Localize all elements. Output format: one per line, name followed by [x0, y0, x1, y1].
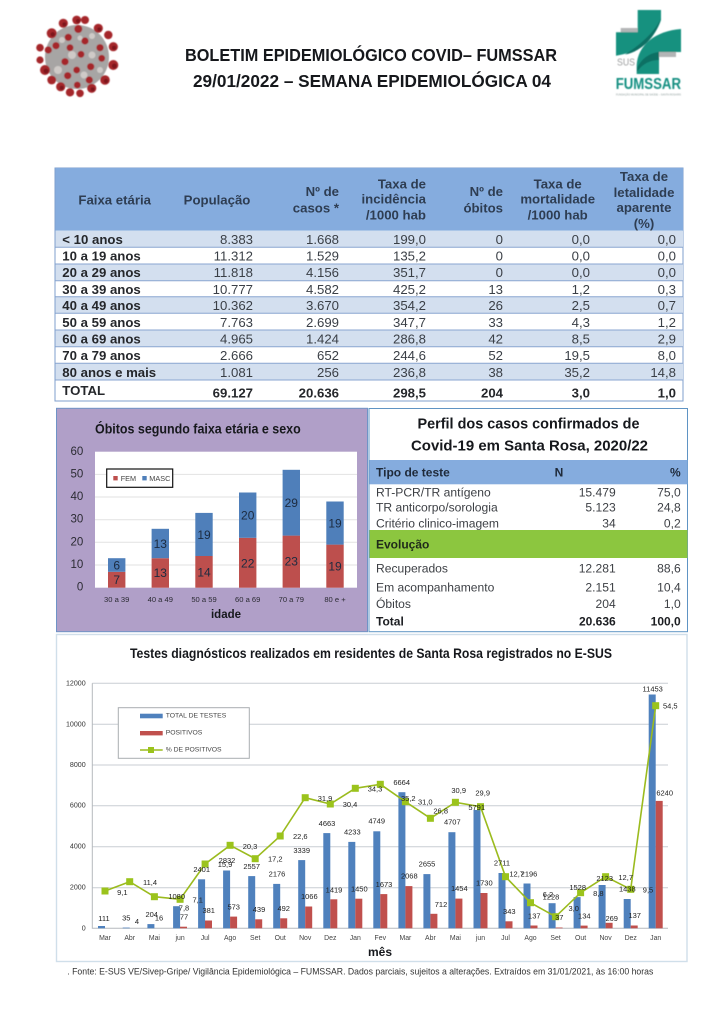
table rows: 1,2: [658, 315, 676, 330]
table rows: 10.777: [213, 282, 253, 297]
table rows: 8.383: [220, 232, 253, 247]
table rows: 11.312: [214, 248, 253, 264]
table rows: 347,7: [393, 315, 426, 330]
table total row: 1,0: [658, 386, 676, 400]
test type rows: 34: [602, 516, 616, 530]
bar values: 7: [113, 573, 120, 587]
table rows: 13: [488, 282, 503, 297]
table rows: 80 anos e mais: [62, 365, 156, 380]
table rows: 0,3: [658, 282, 676, 297]
grid and axis: 10000: [66, 720, 86, 728]
data labels: 573: [227, 902, 240, 912]
table rows: 0,7: [658, 298, 676, 313]
table rows: 10.362: [213, 298, 253, 313]
month labels: [99, 935, 661, 942]
test type rows: 24,8: [657, 500, 681, 514]
bar values: 14: [197, 565, 211, 579]
table header: incidência: [362, 192, 427, 206]
table rows: 38: [488, 365, 503, 380]
table header: Taxa de: [620, 169, 668, 184]
y axis labels: 0: [77, 582, 83, 594]
data labels: 439: [253, 905, 265, 914]
panel: age group table: [55, 168, 683, 401]
month labels: jun: [174, 935, 185, 942]
grid and axis: 4000: [70, 843, 86, 851]
data labels: 137: [628, 911, 641, 920]
month labels: Set: [550, 935, 561, 942]
month labels: Dez: [324, 935, 337, 942]
evolution rows: Recuperados: [376, 561, 448, 575]
month labels: Jul: [201, 935, 210, 942]
test type header: [370, 460, 688, 484]
evolution rows: 10,4: [657, 581, 681, 595]
evolution rows: 2.151: [585, 581, 616, 595]
data labels: 4: [135, 917, 139, 926]
evolution header: Evolução: [376, 538, 429, 552]
x axis labels: 50 a 59: [191, 595, 217, 604]
data labels: 34,3: [368, 784, 382, 794]
table header: óbitos: [463, 200, 503, 216]
positive tests bars: [180, 801, 663, 928]
table rows: 40 a 49 anos: [62, 298, 141, 313]
table header: aparente: [617, 200, 671, 215]
data labels: 54,5: [663, 702, 678, 710]
logo: FUMSSAR: SUS: [617, 58, 635, 68]
data labels: 8,8: [593, 889, 604, 898]
data labels: 20,3: [243, 842, 257, 851]
test type rows: 15.479: [579, 485, 616, 499]
table rows: 4,3: [572, 315, 590, 330]
month labels: Jan: [650, 935, 661, 942]
table rows: 7.763: [220, 315, 253, 330]
grid and axis: 2000: [70, 884, 86, 892]
table rows: 35,2: [564, 365, 590, 380]
data labels: 26,8: [433, 806, 448, 816]
title: BOLETIM EPIDEMIOLÓGICO COVID– FUMSSAR: [185, 44, 557, 65]
bar values: [113, 496, 342, 587]
table rows: 1.424: [306, 332, 339, 346]
chart heading: Óbitos segundo faixa etária e sexo: [95, 419, 301, 436]
data labels: 16: [155, 914, 163, 922]
x axis labels: [104, 595, 346, 604]
table header: (%): [634, 216, 654, 231]
table rows: 354,2: [393, 298, 426, 313]
table rows: 1.081: [220, 365, 253, 380]
table rows: 3.670: [306, 298, 339, 313]
data labels: 22,6: [293, 832, 308, 841]
x axis labels: 60 a 69: [235, 595, 260, 604]
table rows: 33: [488, 315, 503, 330]
grid and axis: 12000: [66, 679, 86, 687]
test type rows: Critério clinico-imagem: [376, 516, 499, 530]
bar values: 20: [241, 509, 255, 523]
y axis labels: 50: [71, 468, 83, 480]
table rows: 50 a 59 anos: [62, 315, 141, 330]
table rows: 425,2: [393, 282, 426, 297]
tests chart legend: % DE POSITIVOS: [166, 746, 222, 754]
data labels: 6240: [656, 788, 673, 798]
month labels: Fev: [375, 935, 387, 942]
data labels: 1528: [569, 883, 586, 892]
table header: Taxa de: [534, 176, 582, 192]
data labels: 4749: [368, 816, 385, 826]
table rows: 1.529: [306, 248, 339, 264]
logo: FUMSSAR: FUNDAÇÃO MUNICIPAL DE SAÚDE – SANTA ROSA/RS: [616, 92, 681, 96]
month labels: Mar: [399, 935, 412, 942]
table header: [56, 168, 683, 231]
data labels: 2196: [521, 870, 537, 878]
month labels: Nov: [599, 935, 612, 942]
bar values: 13: [154, 537, 167, 551]
profile heading: Covid-19 em Santa Rosa, 2020/22: [411, 438, 648, 454]
data labels: 35,2: [401, 794, 416, 803]
month labels: Nov: [299, 935, 312, 942]
month labels: Dez: [625, 935, 637, 942]
total tests bars: [98, 694, 656, 928]
percent positive line: [102, 702, 659, 920]
data labels: 30,4: [343, 800, 357, 809]
y axis labels: 40: [71, 491, 83, 503]
table rows: 0: [496, 265, 503, 280]
data labels: 11453: [643, 684, 663, 694]
month labels: Mar: [99, 935, 112, 942]
table header: mortalidade: [520, 192, 595, 206]
table rows: 286,8: [393, 332, 426, 346]
test type header: N: [555, 465, 563, 479]
footer source note: . Fonte: E-SUS VE/Sivep-Gripe/ Vigilância Epidemiológica – FUMSSAR. Dados parciais, sujeitos a alterações. Extraídos em 31/01/2021, às 16:00 horas: [67, 967, 654, 977]
logo: FUMSSAR: FUMSSAR: [616, 76, 681, 93]
evolution rows: [376, 561, 681, 611]
icon: coronavirus: [36, 16, 118, 97]
month labels: Set: [250, 935, 260, 942]
grid and axis: [66, 679, 668, 932]
table rows: 0,0: [658, 232, 676, 247]
table rows: 8,0: [658, 348, 676, 363]
table total row: 69.127: [213, 386, 253, 400]
y axis labels: 30: [71, 514, 83, 526]
data labels: 17,2: [268, 854, 283, 864]
data labels: 1438: [619, 884, 636, 894]
data labels: 3,0: [568, 904, 579, 913]
month labels: Jul: [501, 935, 510, 942]
data labels: 1080: [168, 892, 185, 901]
table rows: 8,5: [572, 332, 590, 346]
bar values: 6: [113, 559, 120, 573]
test type rows: 5.123: [585, 500, 616, 514]
table rows: 0: [496, 248, 503, 264]
table rows: 11.818: [214, 265, 253, 280]
table header: Taxa de: [378, 176, 426, 192]
table rows: 20 a 29 anos: [62, 265, 141, 280]
data labels: 6,2: [543, 890, 553, 899]
table rows: 1.668: [306, 232, 339, 247]
y axis labels: [71, 446, 83, 594]
profile total row: 20.636: [579, 615, 616, 629]
data labels: 4233: [344, 828, 361, 836]
x axis title: month: mês: [368, 945, 392, 959]
data labels: 31,9: [318, 794, 332, 803]
data labels: 111: [98, 914, 110, 923]
table header: População: [184, 192, 250, 208]
table total row: 20.636: [299, 386, 339, 400]
data labels: 1454: [451, 884, 468, 893]
test type header: Tipo de teste: [376, 465, 450, 479]
table rows: 2,9: [658, 332, 676, 346]
table rows: 4.156: [306, 265, 339, 280]
table rows: 19,5: [564, 348, 590, 363]
month labels: Ago: [524, 935, 537, 942]
data labels: 15,9: [218, 860, 232, 869]
data labels: 2176: [269, 870, 285, 878]
x axis labels: 70 a 79: [279, 595, 304, 604]
data labels: 204: [145, 910, 158, 919]
tests chart legend: [118, 708, 249, 758]
data labels: 2123: [596, 874, 613, 883]
month labels: Out: [575, 935, 586, 942]
table rows: 0,0: [572, 265, 590, 280]
bar values: 29: [285, 496, 298, 510]
table rows: 0: [496, 232, 503, 247]
table rows: 42: [488, 332, 503, 346]
tests chart legend: POSITIVOS: [166, 730, 203, 736]
data labels: 492: [277, 904, 290, 913]
data labels: 3339: [293, 846, 310, 855]
data labels: 7,8: [179, 904, 189, 912]
evolution rows: 1,0: [664, 597, 681, 611]
table rows: 0,0: [658, 248, 676, 264]
data labels: 77: [180, 912, 188, 922]
data labels: 12,7: [509, 870, 524, 878]
table rows: 351,7: [393, 265, 426, 280]
data labels: 2655: [419, 860, 435, 868]
data labels: 9,5: [643, 886, 653, 894]
x axis title: idade: [211, 609, 241, 621]
data labels: 4663: [319, 819, 335, 828]
title: 29/01/2022 – SEMANA EPIDEMIOLÓGICA 04: [193, 70, 551, 91]
panel: confirmed case profile: [369, 408, 688, 632]
chart legend: FEM: [121, 474, 136, 483]
evolution rows: 88,6: [657, 561, 681, 575]
title: [185, 44, 557, 91]
test type header: %: [670, 465, 681, 479]
evolution header: [370, 530, 688, 558]
stacked bar chart: [71, 446, 357, 621]
data labels: 6664: [393, 778, 410, 787]
bar values: 19: [328, 516, 342, 530]
table rows: < 10 anos: [62, 232, 123, 247]
x axis labels: 40 a 49: [148, 595, 173, 604]
month labels: jun: [475, 935, 485, 942]
table rows: 256: [317, 365, 339, 380]
evolution rows: Em acompanhamento: [376, 581, 495, 595]
data labels: 2557: [243, 862, 260, 871]
month labels: Ago: [224, 935, 236, 942]
data labels: 35: [122, 914, 130, 922]
table rows: 2.699: [306, 315, 339, 330]
bar values: 19: [197, 528, 211, 542]
bar values: 22: [241, 557, 255, 571]
data labels: 381: [202, 906, 215, 915]
table total row: 298,5: [393, 386, 426, 400]
data labels: 1673: [376, 880, 392, 889]
panel: deaths by age and sex chart: [56, 408, 368, 632]
table rows: 26: [488, 298, 503, 313]
data labels: 12,7: [618, 873, 633, 882]
table rows: 2.666: [220, 348, 253, 363]
table rows: 652: [317, 348, 339, 363]
table rows: 30 a 39 anos: [62, 282, 141, 297]
test type rows: [376, 485, 681, 530]
data labels: 7,1: [192, 896, 203, 904]
test type rows: RT-PCR/TR antígeno: [376, 485, 491, 499]
table total row: 204: [481, 386, 504, 400]
data labels: 31,0: [418, 798, 433, 806]
table total row: 3,0: [572, 386, 590, 400]
data labels: 1228: [543, 892, 559, 902]
data labels: [98, 684, 678, 926]
table header: /1000 hab: [528, 208, 588, 222]
profile heading: Perfil dos casos confirmados de: [418, 416, 640, 432]
profile heading: [411, 416, 648, 454]
data labels: 1066: [301, 892, 318, 901]
y axis labels: 10: [71, 559, 83, 571]
data labels: 29,9: [475, 788, 490, 798]
table rows: 2,5: [572, 298, 590, 313]
table rows: [56, 231, 683, 380]
data labels: 4707: [444, 818, 461, 826]
table rows: 10 a 19 anos: [62, 248, 141, 264]
table rows: 135,2: [393, 248, 426, 264]
table header: casos *: [293, 200, 340, 216]
table rows: 0,0: [572, 232, 590, 247]
test type rows: TR anticorpo/sorologia: [376, 500, 498, 514]
data labels: 134: [578, 912, 591, 920]
month labels: Abr: [425, 935, 436, 942]
table rows: 0,0: [658, 265, 676, 280]
data labels: 2068: [401, 872, 418, 880]
profile total row: [376, 615, 681, 629]
table rows: 244,6: [393, 348, 426, 363]
table rows: 199,0: [393, 232, 426, 247]
panel: diagnostic tests chart: [56, 634, 687, 962]
table rows: 4.582: [306, 282, 339, 297]
bar values: 23: [285, 555, 298, 569]
table total row: [62, 383, 676, 400]
table header: letalidade: [614, 185, 674, 200]
table header: Faixa etária: [78, 192, 152, 208]
table rows: 0,0: [572, 248, 590, 264]
y axis labels: 20: [71, 536, 83, 548]
data labels: 37: [555, 913, 563, 922]
data labels: 269: [605, 914, 618, 923]
table rows: 1,2: [572, 282, 590, 297]
month labels: Out: [275, 935, 286, 942]
month labels: Mai: [149, 935, 160, 942]
tests chart heading: Testes diagnósticos realizados em residentes de Santa Rosa registrados no E-SUS: [130, 645, 612, 661]
month labels: Mai: [450, 935, 461, 942]
table header: Nº de: [470, 184, 503, 199]
data labels: 11,4: [143, 878, 157, 887]
data labels: 2832: [219, 856, 235, 865]
y axis labels: 60: [71, 446, 83, 458]
table rows: 60 a 69 anos: [62, 332, 141, 346]
data labels: 343: [503, 907, 516, 916]
data labels: 1419: [326, 886, 342, 894]
table total row: TOTAL: [62, 383, 105, 398]
data labels: 5791: [468, 803, 485, 812]
data labels: 30,9: [451, 786, 466, 795]
grid and axis: 8000: [70, 761, 86, 769]
data labels: 9,1: [117, 888, 128, 897]
data labels: 1450: [351, 884, 368, 894]
bar values: 13: [154, 566, 167, 580]
profile total row: 100,0: [651, 615, 681, 629]
data labels: 2711: [494, 858, 510, 868]
tests chart legend: TOTAL DE TESTES: [166, 712, 227, 720]
x axis labels: 80 e +: [324, 595, 346, 604]
month labels: Jan: [350, 935, 361, 942]
x axis labels: 30 a 39: [104, 595, 129, 604]
table rows: 4.965: [220, 332, 253, 346]
table header: /1000 hab: [366, 208, 426, 222]
logo: FUMSSAR: [616, 10, 681, 96]
data labels: 712: [435, 900, 447, 909]
test type rows: 75,0: [657, 485, 681, 499]
table header: Nº de: [306, 184, 339, 199]
table rows: 70 a 79 anos: [62, 348, 141, 363]
month labels: Abr: [124, 935, 136, 942]
evolution rows: 204: [596, 597, 616, 611]
chart legend: [107, 469, 173, 487]
profile total row: Total: [376, 615, 404, 629]
grid and axis: 0: [82, 924, 86, 932]
data labels: 2401: [193, 865, 210, 874]
test type rows: 0,2: [664, 516, 681, 530]
table rows: 14,8: [650, 365, 676, 380]
chart legend: MASC: [149, 474, 170, 483]
table rows: 52: [488, 348, 503, 363]
table rows: 236,8: [393, 365, 426, 380]
bar values: 19: [328, 560, 342, 574]
data labels: 137: [528, 912, 541, 920]
data labels: 1730: [476, 878, 493, 888]
evolution rows: Óbitos: [376, 596, 411, 611]
evolution rows: 12.281: [579, 561, 616, 575]
grid and axis: 6000: [70, 802, 86, 810]
